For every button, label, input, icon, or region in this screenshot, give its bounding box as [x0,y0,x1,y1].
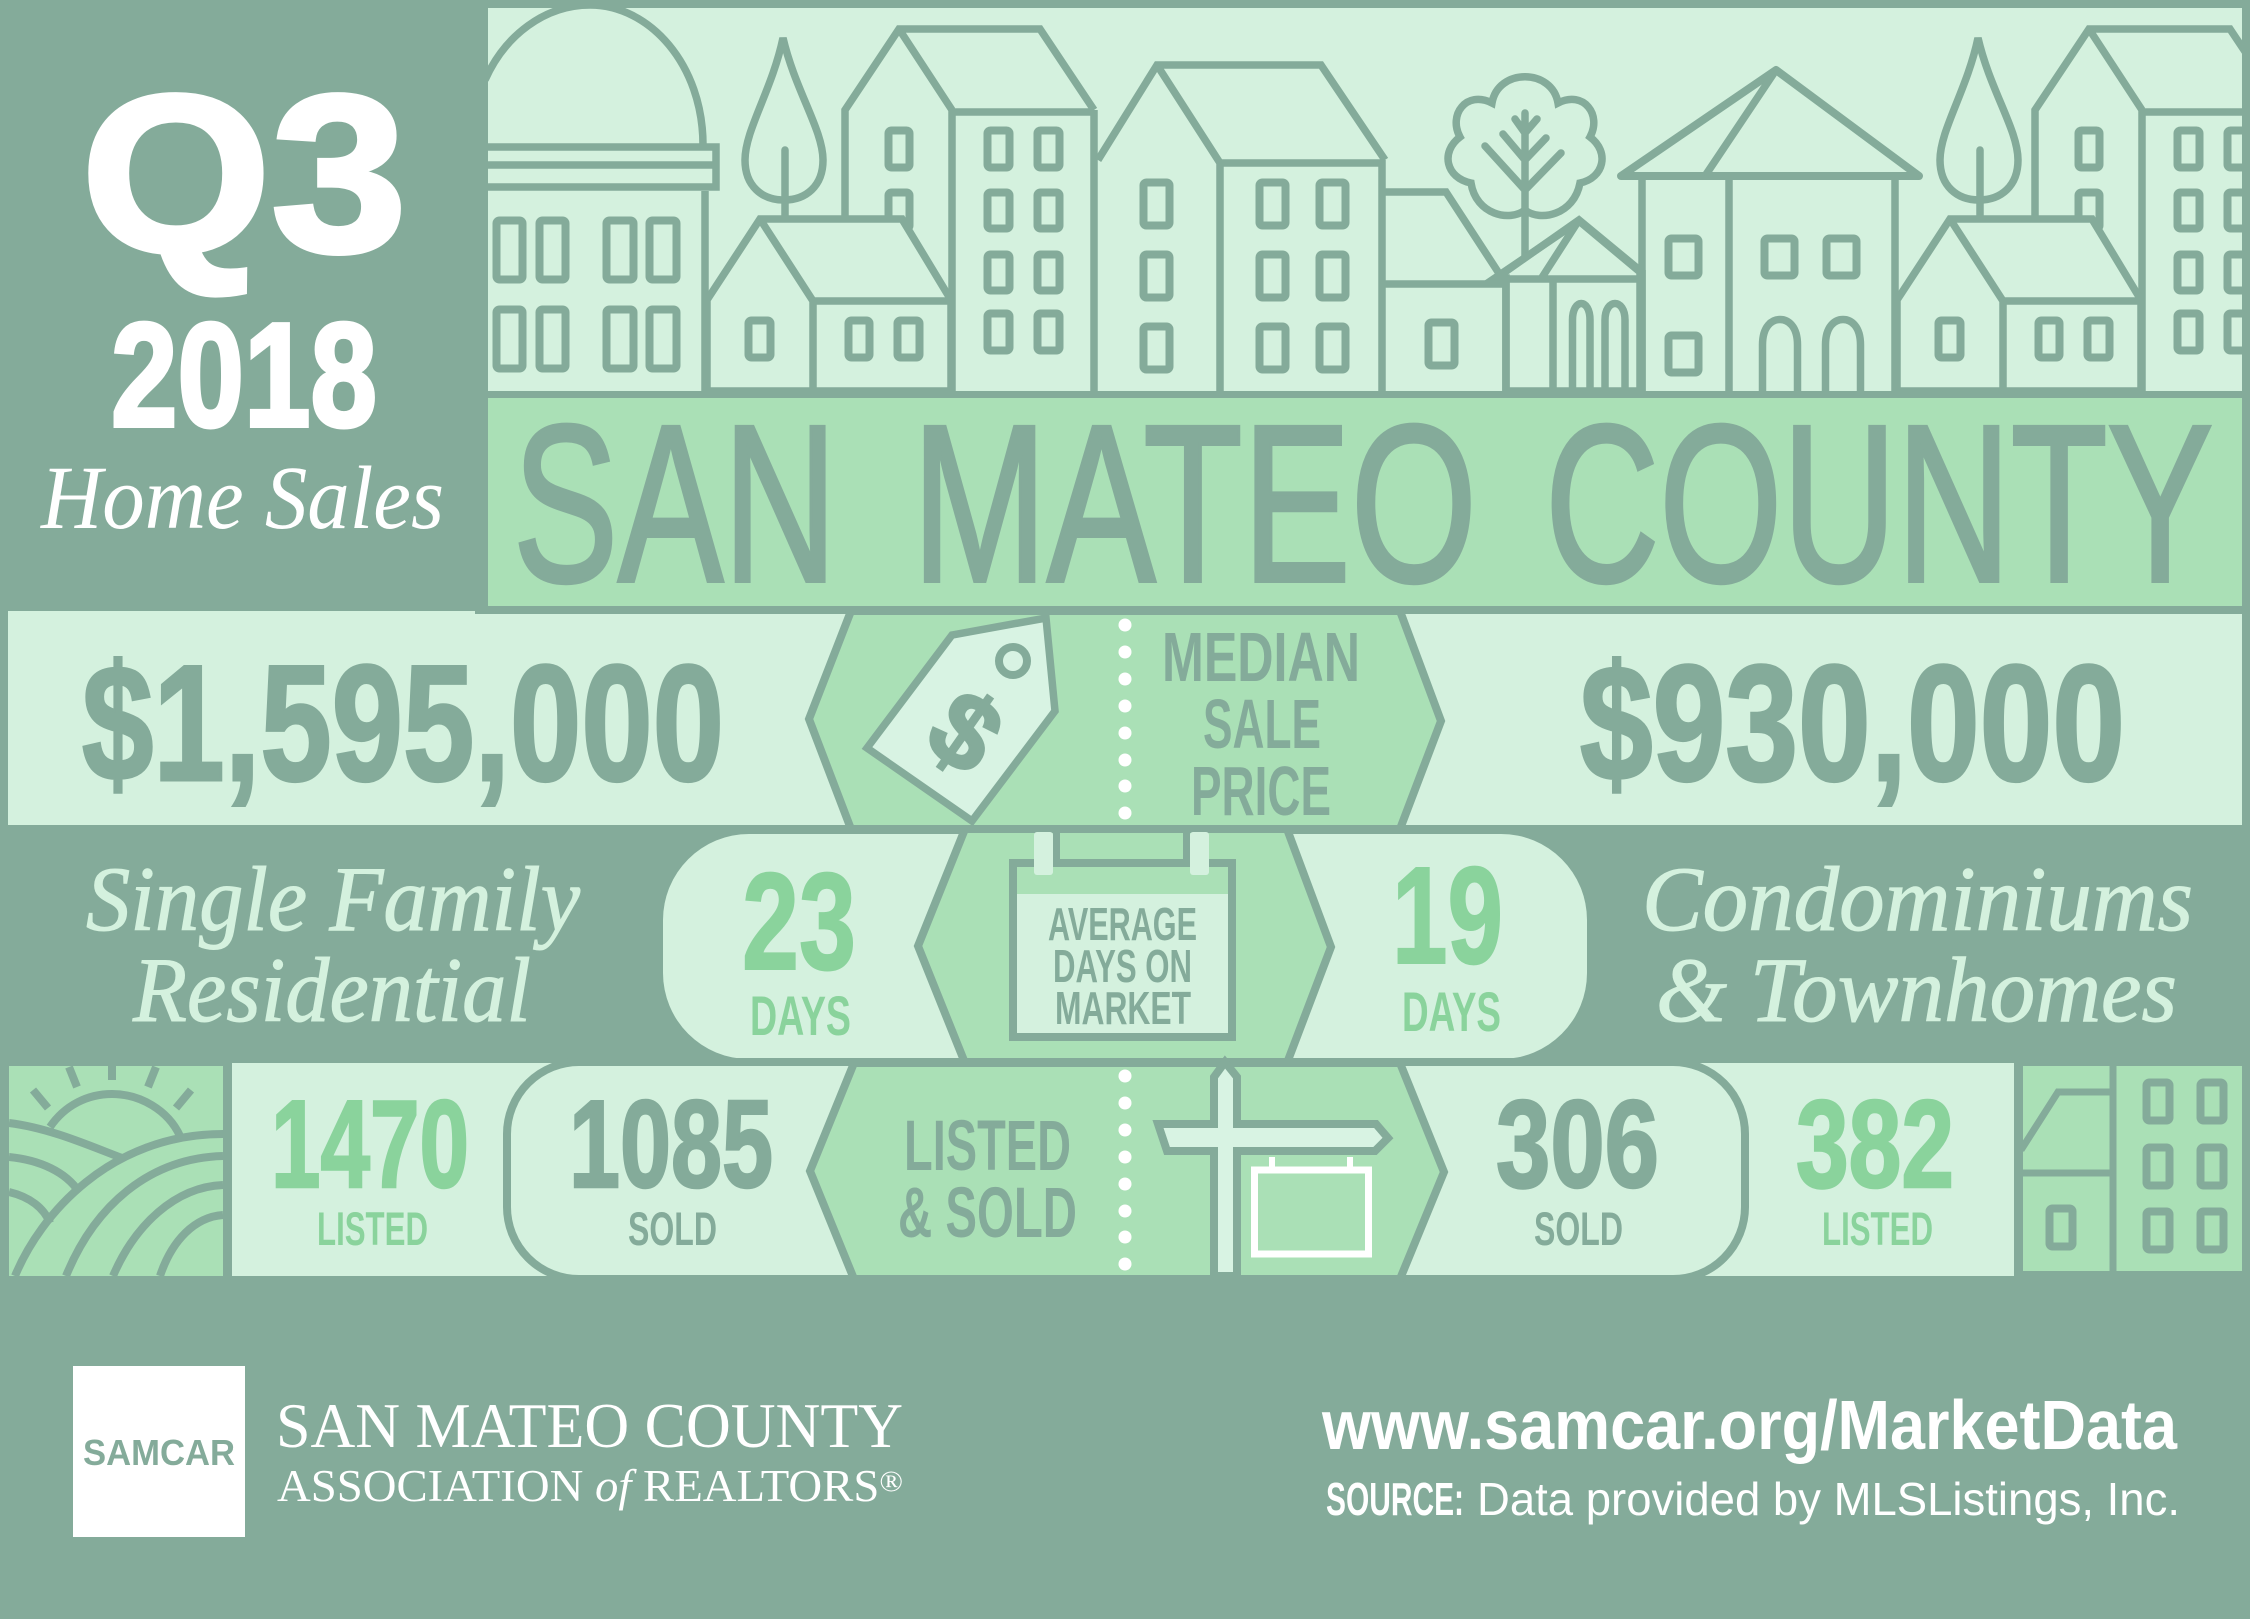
text: data source: Data provided by MLSListings, Inc. [1477,1473,2180,1525]
label: average days on market: DAYS ON [1053,940,1192,992]
title: San Mateo County: SAN [513,379,837,629]
title: San Mateo County [513,379,2213,629]
icon: small house right [1897,219,2141,391]
text: website url: www.samcar.org/MarketData [1321,1386,2178,1464]
text: single family residential: Single Family [86,848,580,950]
heading: Home Sales: Home Sales [40,449,444,548]
text: condominiums and townhomes [1642,848,2193,1041]
icon: tall house centre [1098,65,1385,391]
hexagon: listed and sold [810,1063,1444,1279]
price: single family median: $1,595,000 [82,631,724,815]
stat: 23 days [742,845,856,1047]
label: median sale price [1162,618,1360,830]
title: San Mateo County: MATEO [912,379,1477,629]
stat: 19 days: 19 [1392,839,1503,993]
text: association name: ® [879,1465,903,1498]
text: condominiums and townhomes: & Townhomes [1656,939,2177,1041]
icon: condo buildings [2018,1066,2242,1271]
stat: 1085 sold [569,1076,773,1255]
text: data source: SOURCE: [1326,1473,1464,1525]
panel: county title [488,379,2242,629]
stat: 23 days: 23 [742,845,856,999]
text: single family residential [86,848,580,1041]
hexagon: average days on market [918,829,1331,1063]
icon: for-sale signpost [1158,1062,1388,1276]
logo: SAMCAR square [73,1366,245,1537]
label: average days on market [1048,898,1197,1034]
pill: sold counts [507,1062,1745,1279]
stat: 306 sold: SOLD [1534,1202,1623,1255]
logo: SAMCAR square: SAMCAR [83,1432,235,1473]
heading: 2018: 2018 [111,293,377,458]
icon: tall house right [2035,29,2250,391]
text: association name: ASSOCIATION of REALTORS [277,1461,870,1511]
heading: Q3: Q3 [81,49,407,299]
stat: 1470 listed: 1470 [271,1076,469,1214]
stat: 382 listed [1796,1076,1954,1255]
panel: streetscape illustration [480,5,2250,391]
stat: 19 days [1392,839,1503,1043]
stat: 382 listed: LISTED [1822,1202,1933,1255]
label: listed and sold [898,1107,1077,1253]
icon: round tree [1448,77,1602,258]
panel: listed and sold row [0,1062,2250,1288]
icon: small tower house [1495,220,1642,391]
panel: average days on market row [663,829,1587,1063]
icon: tall house left [845,29,1094,391]
text: association name [276,1391,903,1511]
text: single family residential: Residential [132,939,531,1041]
icon: big tower house [1621,70,1919,391]
stat: 1470 listed [271,1076,469,1255]
divider: dotted line [1118,1070,1132,1270]
label: listed and sold: & SOLD [898,1174,1077,1253]
price: condo median: $930,000 [1580,631,2125,815]
text: association name: SAN MATEO COUNTY [276,1391,903,1461]
label: median sale price: SALE [1203,685,1321,763]
stat: 1470 listed: LISTED [317,1202,428,1255]
icon: low house [1382,192,1506,391]
label: median sale price: PRICE [1191,752,1331,830]
icon: domed building [480,5,718,391]
stat: 382 listed: 382 [1796,1076,1954,1214]
divider: dotted line [1118,618,1132,820]
stat: 306 sold: 306 [1496,1076,1659,1214]
panel: median sale price row [8,611,2242,830]
label: average days on market: MARKET [1055,982,1191,1034]
icon: price tag: $ [907,667,1023,797]
hexagon: median sale price [809,611,1441,829]
icon: tree right [1940,38,2018,217]
icon: small house left [707,219,951,391]
label: average days on market: AVERAGE [1048,898,1197,950]
label: median sale price: MEDIAN [1162,618,1360,696]
stat: 1085 sold: 1085 [569,1076,773,1214]
icon: tree left [745,38,823,217]
icon: price tag [867,618,1055,821]
icon: sun over hills [9,1066,223,1276]
stat: 23 days: DAYS [750,984,851,1047]
icon: hanging calendar [1013,830,1232,1037]
stat: 1085 sold: SOLD [628,1202,717,1255]
label: listed and sold: LISTED [904,1107,1071,1186]
text: condominiums and townhomes: Condominiums [1642,848,2193,950]
stat: 306 sold [1496,1076,1659,1255]
stat: 19 days: DAYS [1402,980,1501,1043]
